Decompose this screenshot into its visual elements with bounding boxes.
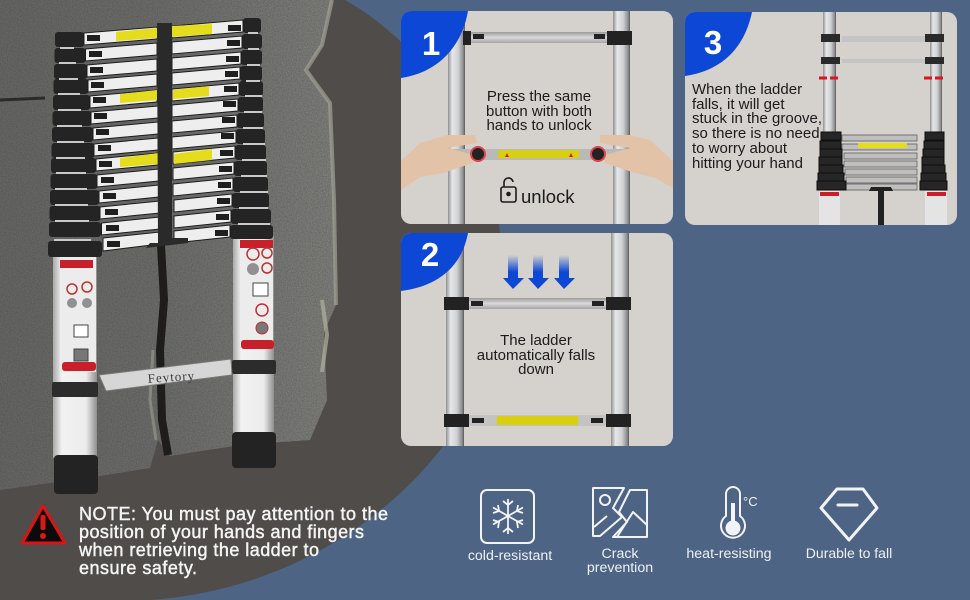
left lower rail bbox=[52, 250, 98, 494]
step 1 text: button with both bbox=[486, 103, 592, 120]
step 2 badge: 2 bbox=[421, 236, 439, 273]
step 3 text: falls, it will get bbox=[692, 96, 785, 113]
left collars bbox=[48, 32, 102, 257]
hands bbox=[401, 135, 673, 190]
collar stacks bbox=[817, 132, 846, 190]
panel: stone wall bbox=[0, 0, 340, 490]
label: heat-resisting: heat-resisting bbox=[686, 546, 772, 562]
right rungs bbox=[172, 20, 243, 243]
step 2 text: automatically falls bbox=[477, 347, 595, 364]
red button circles bbox=[471, 147, 605, 161]
step 3 text: When the ladder bbox=[692, 81, 802, 98]
concrete floor bbox=[0, 0, 501, 600]
icon: gem durable bbox=[821, 489, 877, 540]
step 1 text: hands to unlock bbox=[486, 117, 592, 134]
note text: NOTE: You must pay attention to the bbox=[79, 504, 388, 524]
label: durable to fall: Durable to fall bbox=[806, 545, 892, 561]
note text: position of your hands and fingers bbox=[79, 522, 364, 542]
compressed rungs bbox=[842, 135, 917, 190]
label: crack prevention: Crack bbox=[601, 546, 639, 562]
panel: step 2 bbox=[401, 233, 673, 446]
down arrows bbox=[503, 255, 575, 289]
right collars bbox=[230, 18, 273, 239]
icon: thermometer: °C bbox=[743, 494, 758, 509]
left collar highlights bbox=[54, 48, 91, 240]
yellow warning labels bbox=[116, 24, 212, 167]
step 3 ladder bbox=[817, 12, 947, 225]
red arrows bbox=[819, 76, 943, 80]
label: cold-resistant: cold-resistant bbox=[468, 548, 552, 564]
step 2 text bbox=[477, 332, 595, 378]
unlock icon bbox=[501, 178, 516, 202]
step 3 text: so there is no need bbox=[692, 125, 820, 142]
label: crack prevention bbox=[587, 546, 653, 576]
step 3 text: hitting your hand bbox=[692, 155, 803, 172]
step 2 badge bbox=[401, 233, 468, 291]
step 1 text: Press the same bbox=[487, 88, 591, 105]
unlock label: unlock bbox=[521, 186, 575, 207]
lower tubes bbox=[819, 191, 840, 225]
right lower rail bbox=[232, 236, 276, 468]
step 3 text bbox=[692, 81, 822, 172]
step 3 text: to worry about bbox=[692, 140, 788, 157]
step 3 text: stuck in the groove, bbox=[692, 110, 822, 127]
step 1 ladder bbox=[447, 11, 632, 224]
step 2 text: down bbox=[518, 361, 554, 378]
note text bbox=[78, 504, 388, 578]
step 1 text bbox=[486, 88, 592, 134]
step 1 badge bbox=[401, 11, 468, 78]
warning icon bbox=[22, 506, 65, 543]
step 3 badge: 3 bbox=[704, 24, 722, 61]
centre strap bbox=[146, 23, 188, 248]
icon: thermometer bbox=[721, 487, 758, 538]
ladder bbox=[48, 18, 276, 494]
step 2 text: The ladder bbox=[500, 332, 572, 349]
Feytory bottom rung: Feytory bbox=[147, 368, 196, 386]
step 3 badge bbox=[685, 12, 752, 76]
step 2 ladder bbox=[444, 233, 631, 446]
right collar highlights bbox=[238, 33, 270, 224]
step 1 badge: 1 bbox=[422, 25, 440, 62]
left rungs bbox=[84, 27, 160, 251]
icon: snowflake cold-resistant bbox=[481, 490, 534, 543]
rung buttons bbox=[87, 25, 241, 247]
label: crack prevention: prevention bbox=[587, 560, 653, 576]
note text: when retrieving the ladder to bbox=[78, 540, 319, 560]
note text: ensure safety. bbox=[79, 558, 197, 578]
icon: crack prevention bbox=[593, 488, 647, 537]
panel: step 3 bbox=[685, 12, 957, 225]
panel: step 1 bbox=[401, 11, 673, 224]
Feytory bottom rung bbox=[99, 359, 232, 391]
centre strut bbox=[869, 187, 893, 225]
